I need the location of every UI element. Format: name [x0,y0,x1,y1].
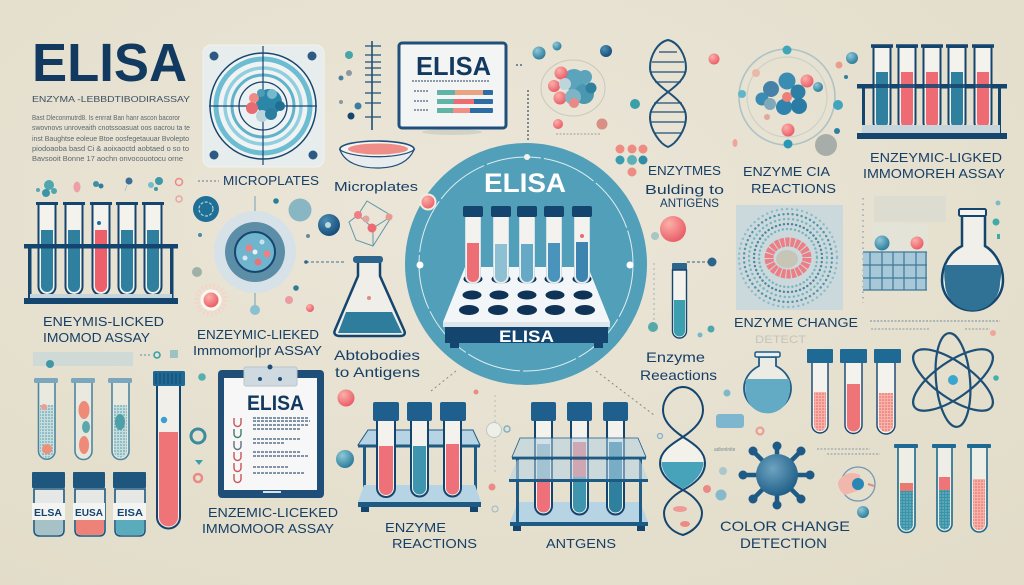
icon: bead cluster [616,144,648,176]
label: enzymes binding: ANTIGENS [660,196,719,210]
liquids [41,230,159,292]
tubes [531,402,628,514]
label: enzemic-liceked [202,505,338,536]
panel: right tubes B [894,444,991,532]
liquids [876,72,989,128]
label: enzymis-licked: IMOMOD ASSAY [43,330,150,345]
label: enzyme reactions bottom: REACTIONS [392,536,477,551]
jar labels [34,507,143,519]
icon: molecule network [349,201,392,246]
clipboard title: ELISA [247,392,304,415]
jar labels: ELSA [34,507,62,519]
icon: bowl [340,141,414,168]
panel: left tube rack [24,204,178,304]
label: enzyme change detect: DETECT [755,334,806,346]
icon: sunburst [197,286,225,314]
panel: right tubes A [807,349,901,434]
molecule cluster [246,89,285,122]
panel: faded strip above sample tubes [33,350,178,368]
label: antigens: ANTGENS [546,536,616,551]
panel: enzyme dot map [736,205,843,310]
body text: swovnovs unroveaith cnotssoasuat oos oacrou ta te [32,123,190,132]
icon: large red tube [153,371,206,528]
panel: top-right tube rack [857,46,1007,139]
title block [32,33,190,163]
panel: misc nodes near virus: adionlnite [714,447,736,453]
label: enzymic-linked left [193,327,322,358]
body text: piodoaoba basd Ci & aoixaoctd aobtaed o so to [32,144,189,153]
label: enzemic-liceked: IMMOMOOR ASSAY [202,521,334,536]
label: enzyme reactions top: ENZYME CIA [743,164,830,179]
label: enzymic-linked top right [863,150,1005,181]
body text: inst Baughtse eoleue Btoe oosfegetauuar Bvolepto [32,134,189,143]
body text: Bavsooit Bonne 17 aochn onvocouotocu orne [32,154,183,163]
icon: round flask [744,352,791,413]
label: enzyme reactions bottom [385,520,477,551]
jar labels: EUSA [75,507,103,519]
label: enzymic-linked top right: ENZEYMIC-LIGKED [870,150,1002,165]
label: enzemic-liceked: ENZEMIC-LICEKED [208,505,338,520]
panel: bottom rack B [509,402,648,531]
label: enzymes binding: Bulding to [645,182,724,197]
panel: orbit molecule [708,46,858,156]
label: color change detection: COLOR CHANGE [720,518,850,534]
panel: central ELISA circle [405,143,647,385]
connector dash [198,180,219,182]
plate label: ELISA [499,327,554,346]
icon: conical flask [334,256,405,336]
label: antibodies: Abtobodies [334,347,420,363]
label: enzymes binding [645,163,724,210]
panel: ELISA jars [32,472,146,536]
label: enzyme reactions top: REACTIONS [751,181,836,196]
label: enzymic-linked top right: IMMOMOREH ASSAY [863,166,1005,181]
label: enzyme reactions mid [640,349,717,383]
panel: enzyme tube and side nodes [648,216,716,338]
label: enzymis-licked [43,314,164,345]
panel: misc nodes near virus [703,390,764,500]
circle title: ELISA [484,168,566,198]
label: enzymes binding: ENZYTMES [648,163,721,178]
body text: Bast Dleconmutrd8. Is enrrat Ban hanr ascon bacoror [32,113,180,122]
rack plate [443,267,610,348]
label: enzyme change detect [734,315,1000,346]
jar labels: EISA [117,507,143,519]
label: microplates caps: MICROPLATES [223,173,319,188]
panel: sample tubes [34,378,132,460]
panel: enzyme lens icon [192,196,345,315]
decorative side items left of racks [336,390,354,468]
label: enzyme change detect: ENZYME CHANGE [734,315,858,330]
red core [769,242,807,274]
panel: clipboard [218,364,324,498]
clipboard text lines [253,418,310,473]
label: antibodies [334,347,420,380]
label: enzymic-linked left: Immomor|pr ASSAY [193,343,322,358]
label: microplates: Microplates [334,179,419,194]
label: color change detection [720,518,850,551]
label: color change detection: DETECTION [740,535,827,551]
icon: small atom [817,449,880,518]
label: enzyme reactions mid: Reeactions [640,367,717,383]
test tubes in plate [463,206,592,284]
label: antibodies: to Antigens [335,364,420,380]
monitor title: ELISA [416,51,491,81]
subtitle: ENZYMA -LEBBDTIBODIRASSAY [32,94,190,104]
panel: scale ruler and dots [338,41,381,130]
chart: faded grid with balls [863,196,946,303]
panel: mini connector nodes [431,371,662,512]
icon: DNA helix [650,40,686,147]
panel: small icons row under title [36,177,182,202]
checklist marks [234,418,241,482]
tubes [373,402,466,497]
label: enzyme reactions bottom: ENZYME [385,520,446,535]
icon: atom [904,330,1002,428]
panel: microplate target card [203,45,324,167]
icon: virus particle [738,442,814,510]
label: enzyme reactions mid: Enzyme [646,349,705,365]
label: enzyme reactions top [743,164,836,196]
label: enzymis-licked: ENEYMIS-LICKED [43,314,164,329]
title: ELISA [32,33,187,93]
icon: pink node on ring [420,194,436,210]
icon: lower DNA with liquid [660,387,705,535]
monitor bars [412,81,493,113]
panel: monitor [399,43,506,135]
label: enzymic-linked left: ENZEYMIC-LIEKED [197,327,319,342]
panel: bottom rack A [358,402,481,512]
body text [32,113,190,163]
panel: central molecule [516,42,640,140]
shelves [512,438,646,457]
icon: round flask right [942,200,1003,310]
